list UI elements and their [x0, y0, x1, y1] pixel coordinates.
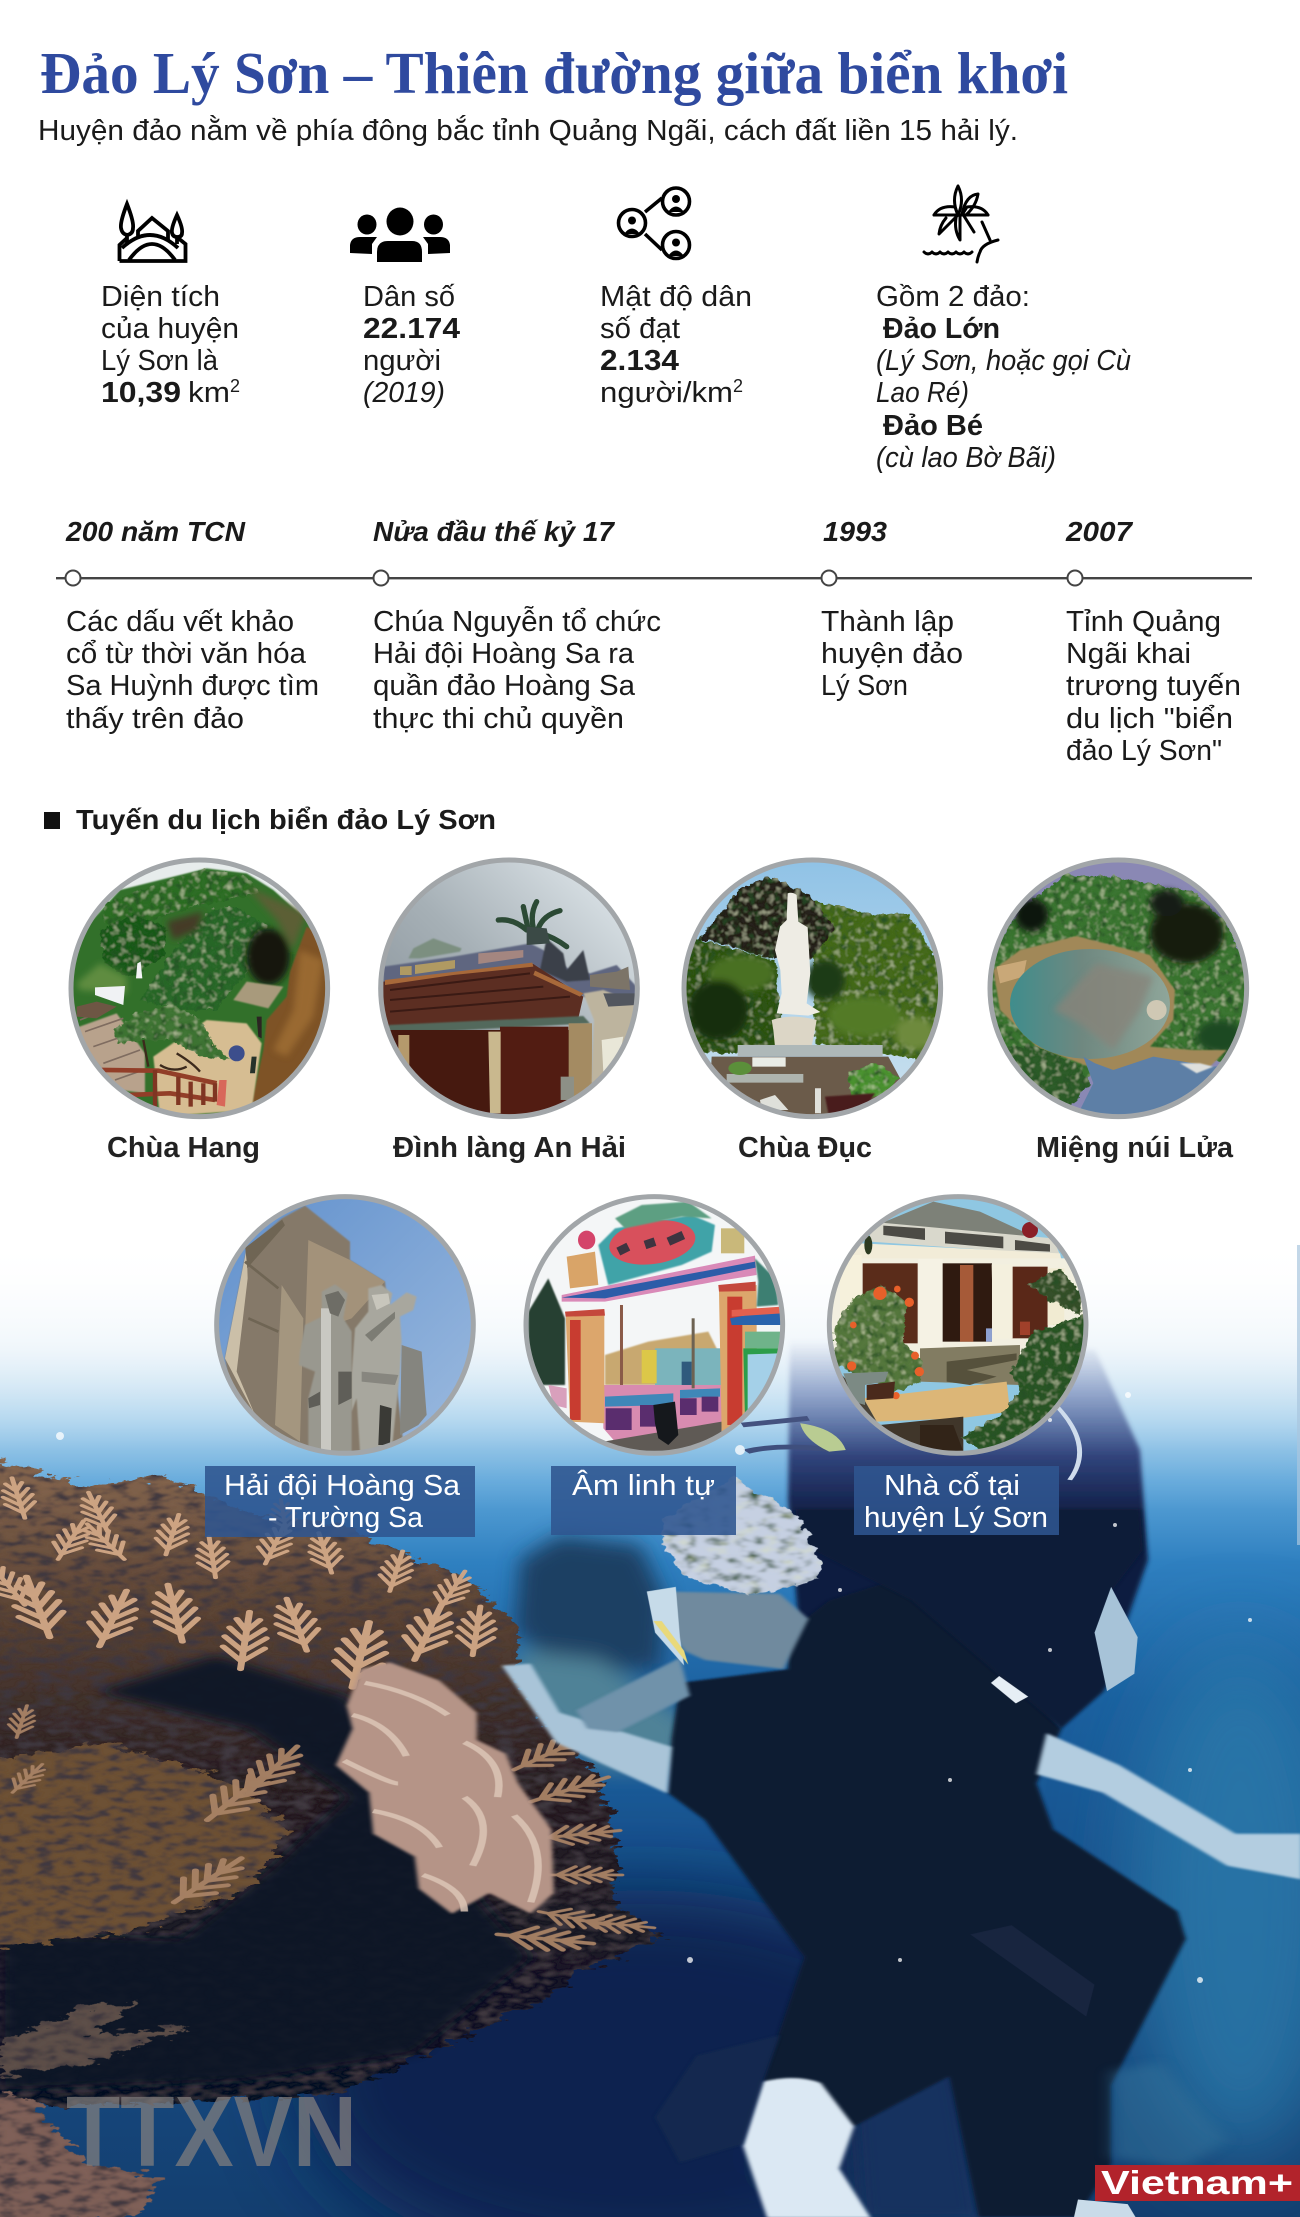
photo circle: Nhà cổ [827, 1192, 1093, 1458]
stat: population [350, 208, 460, 409]
icon: group of people [350, 208, 450, 262]
text: area [101, 281, 240, 409]
subtitle: Huyện đảo nằm về phía đông bắc tỉnh Quảng Ngãi, cách đất liền 15 hải lý. [38, 114, 1018, 147]
text: islands: Đảo Bé [883, 410, 983, 442]
patterned cap [663, 1477, 821, 1596]
event: 17th century: quần đảo Hoàng Sa [373, 670, 636, 702]
title: Đảo Lý Sơn – Thiên đường giữa biển khơi [40, 40, 1068, 106]
distant reef [515, 1535, 690, 1770]
text: population: (2019) [363, 377, 445, 409]
event: 1993: Thành lập [821, 606, 954, 638]
text: density [600, 281, 752, 409]
face [663, 1591, 808, 1669]
text: islands: (cù lao Bờ Bãi) [876, 442, 1056, 474]
text: area: 2 [230, 376, 240, 396]
mask yellow strap [653, 1621, 688, 1665]
text: population: Dân số [363, 281, 455, 313]
event: 200 BC: Sa Huỳnh được tìm [66, 670, 319, 702]
stat: islands [876, 186, 1131, 474]
gap between legs water [854, 2067, 978, 2217]
text: islands: Gồm 2 đảo: [876, 281, 1030, 313]
event: 2007: trương tuyến [1066, 670, 1241, 702]
stat: density [600, 188, 752, 409]
text: population [363, 281, 460, 409]
text: area: km [188, 377, 230, 409]
watermark: TTXVN: TTXVN [66, 2076, 357, 2188]
icon: connected people [618, 188, 690, 258]
event: 17th century: Nửa đầu thế kỷ 17 [373, 516, 615, 547]
photo circle: Âm linh tự gate [522, 1192, 788, 1458]
white fade at top of photo [0, 1240, 1300, 1510]
event: 17th century: Hải đội Hoàng Sa ra [373, 638, 635, 670]
event: 2007: du lịch "biển [1066, 703, 1233, 735]
event: 1993: Lý Sơn [821, 670, 908, 702]
regulator hoses [742, 1407, 1080, 1480]
event: 1993: 1993 [823, 516, 887, 547]
timeline axis [56, 570, 1252, 586]
coral feather fans [0, 1476, 498, 1689]
event: 200 BC [65, 516, 319, 735]
soft leather coral [336, 1662, 554, 1914]
event: 200 BC: cổ từ thời văn hóa [66, 638, 307, 670]
drifting coral fronds [0, 2003, 191, 2076]
text: islands [876, 281, 1131, 474]
sea water gradient [0, 1240, 1300, 2217]
text: area: 10,39 [101, 377, 181, 409]
stat: area [101, 204, 240, 409]
dive mask [647, 1587, 684, 1666]
text: density: người/km [600, 377, 733, 409]
event: 2007 [1065, 516, 1241, 767]
text: islands: Lao Ré) [876, 377, 969, 409]
event: 2007: đảo Lý Sơn" [1066, 735, 1222, 767]
event: 1993: huyện đảo [821, 638, 963, 670]
coral dark interior [0, 1655, 531, 2090]
thin right edge line [1297, 1245, 1300, 1545]
timeline [56, 516, 1252, 767]
text: area: của huyện [101, 313, 239, 345]
photo circle: Chùa Đục [682, 857, 948, 1123]
photo circle: Chùa Hang [67, 857, 333, 1123]
lower coral fronds [2, 1704, 657, 1954]
text: density: số đạt [600, 313, 680, 345]
text: population: người [363, 345, 441, 377]
event: 17th century: thực thi chủ quyền [373, 703, 624, 735]
caption box: Nhà cổ tại huyện Lý Sơn [854, 1466, 1059, 1535]
label: Đình làng An Hải: Đình làng An Hải [393, 1132, 626, 1164]
caption box: Nhà cổ tại huyện Lý Sơn: Nhà cổ tại [884, 1470, 1020, 1502]
wetsuit band [970, 1925, 1095, 2017]
event: 17th century [373, 516, 661, 735]
caption box: Hải đội Hoàng Sa - Trường Sa [205, 1466, 475, 1537]
label: Chùa Hang: Chùa Hang [107, 1132, 260, 1164]
photo circle: Đình làng An Hải [377, 857, 643, 1123]
caption box: Nhà cổ tại huyện Lý Sơn: huyện Lý Sơn [864, 1502, 1048, 1534]
icon: house on hill [120, 204, 186, 261]
deep water shading [300, 1640, 1300, 2217]
text: area: Diện tích [101, 281, 220, 313]
diver and coral in photo coordinates [0, 1450, 1300, 2217]
event: 2007: 2007 [1065, 516, 1134, 547]
photo circle: Miệng núi Lửa [987, 857, 1253, 1123]
coral brown patch [0, 1742, 290, 1948]
caption box: Hải đội Hoàng Sa - Trường Sa: Hải đội Hoàng Sa [224, 1470, 461, 1502]
text: density: 2 [733, 376, 743, 396]
text: density: Mật độ dân [600, 281, 752, 313]
photo circle: Hải đội Hoàng Sa monument [212, 1192, 478, 1458]
event: 17th century: Chúa Nguyễn tổ chức [373, 605, 661, 638]
label: Miệng núi Lửa: Miệng núi Lửa [1036, 1132, 1234, 1164]
text: area: Lý Sơn là [101, 345, 219, 377]
tank highlight [1095, 1587, 1138, 1691]
equipment highlights [991, 1676, 1028, 1703]
icon: palm island [924, 186, 998, 262]
reef lower right [1111, 2062, 1227, 2168]
background photo: underwater diver and coral reef [0, 1240, 1300, 2217]
text: population: 22.174 [363, 313, 460, 345]
coral reef mass [0, 1450, 663, 2108]
other forearm [576, 1658, 690, 1732]
lower left coral [0, 2094, 166, 2217]
caption box: Âm linh tự: Âm linh tự [572, 1469, 715, 1502]
left arm [502, 1664, 672, 1794]
event: 200 BC: thấy trên đảo [66, 703, 244, 735]
event: 2007: Ngãi khai [1066, 638, 1191, 670]
lower calf [1074, 2200, 1136, 2217]
water bubbles [56, 1392, 1252, 1983]
text: islands: (Lý Sơn, hoặc gọi Cù [876, 345, 1131, 377]
event: 200 BC: 200 năm TCN [65, 516, 246, 547]
caption box: Hải đội Hoàng Sa - Trường Sa: - Trường Sa [268, 1502, 424, 1534]
second diver tank top [796, 1509, 1143, 1729]
event: 1993 [821, 516, 963, 702]
caption box: Âm linh tự [551, 1466, 736, 1535]
second diver silhouette behind [788, 1340, 1148, 1640]
fin [655, 2035, 779, 2163]
event: 200 BC: Các dấu vết khảo [66, 606, 294, 638]
label: Chùa Đục: Chùa Đục [738, 1132, 872, 1164]
text: density: 2.134 [600, 345, 679, 377]
text: islands: Đảo Lớn [883, 313, 1000, 345]
right arm [1036, 1733, 1300, 1879]
knee [743, 2078, 871, 2217]
section heading: tourist route: Tuyến du lịch biển đảo Lý Sơn [76, 804, 496, 835]
event: 2007: Tỉnh Quảng [1066, 606, 1221, 638]
main diver body [668, 1564, 1186, 2217]
logo: Vietnam+: Vietnam+ [1101, 2164, 1293, 2201]
